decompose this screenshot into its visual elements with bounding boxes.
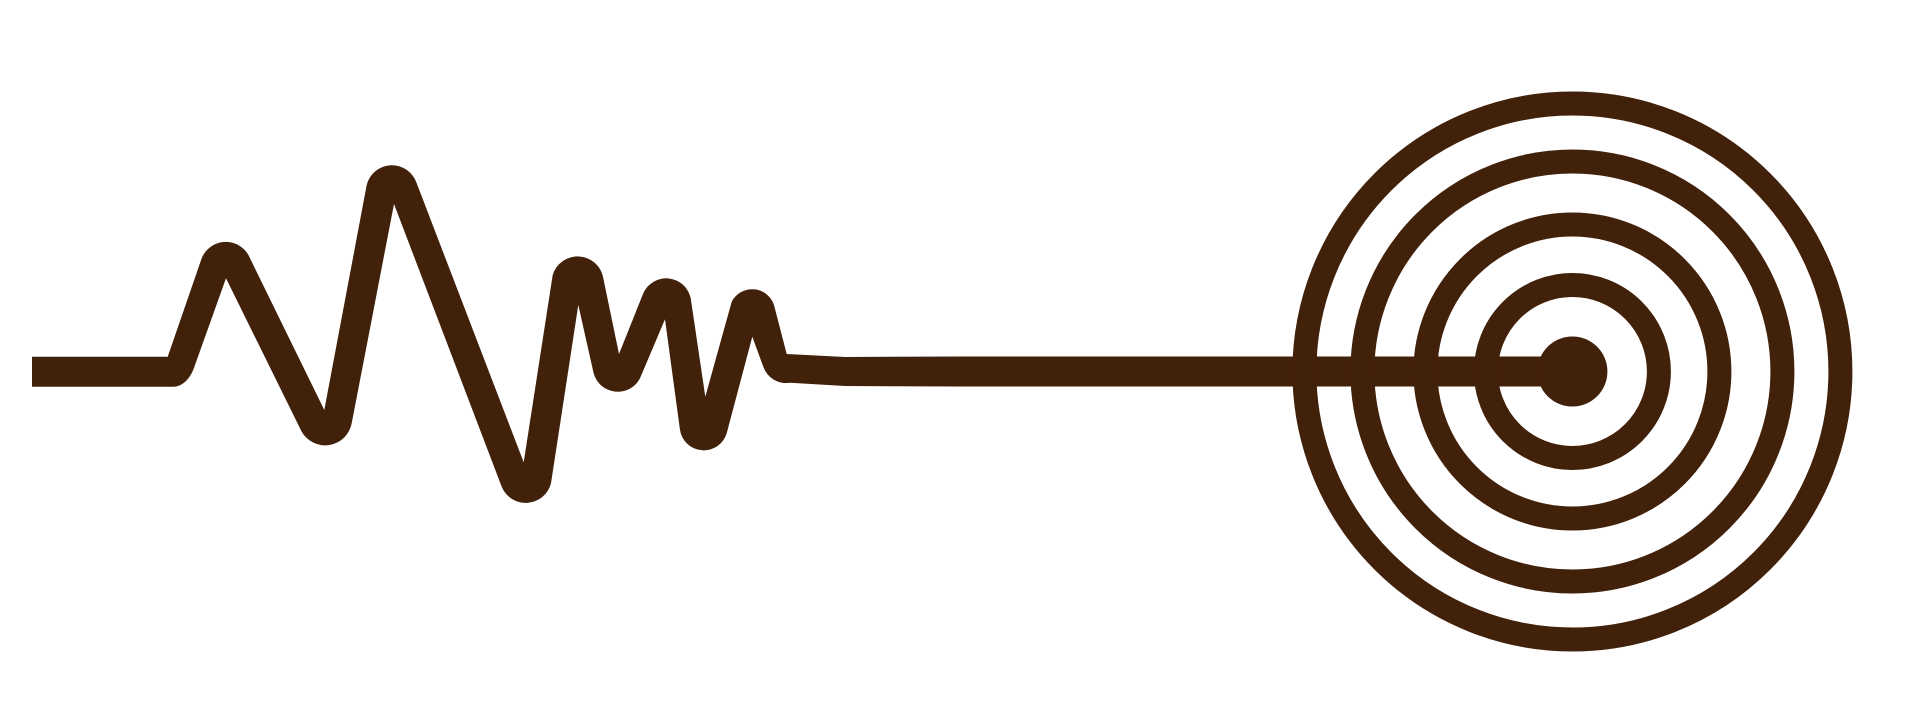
target: concentric rings with bullseye [1290,104,1840,640]
connector line through rings to bullseye [1290,356,1572,386]
bullseye dot [1537,336,1607,406]
ring: outer [1304,104,1840,640]
ring: second [1362,162,1782,582]
waveform: jagged pulse line with flat tail [32,165,1300,503]
ring: third [1425,224,1719,518]
ring: inner [1486,285,1659,458]
